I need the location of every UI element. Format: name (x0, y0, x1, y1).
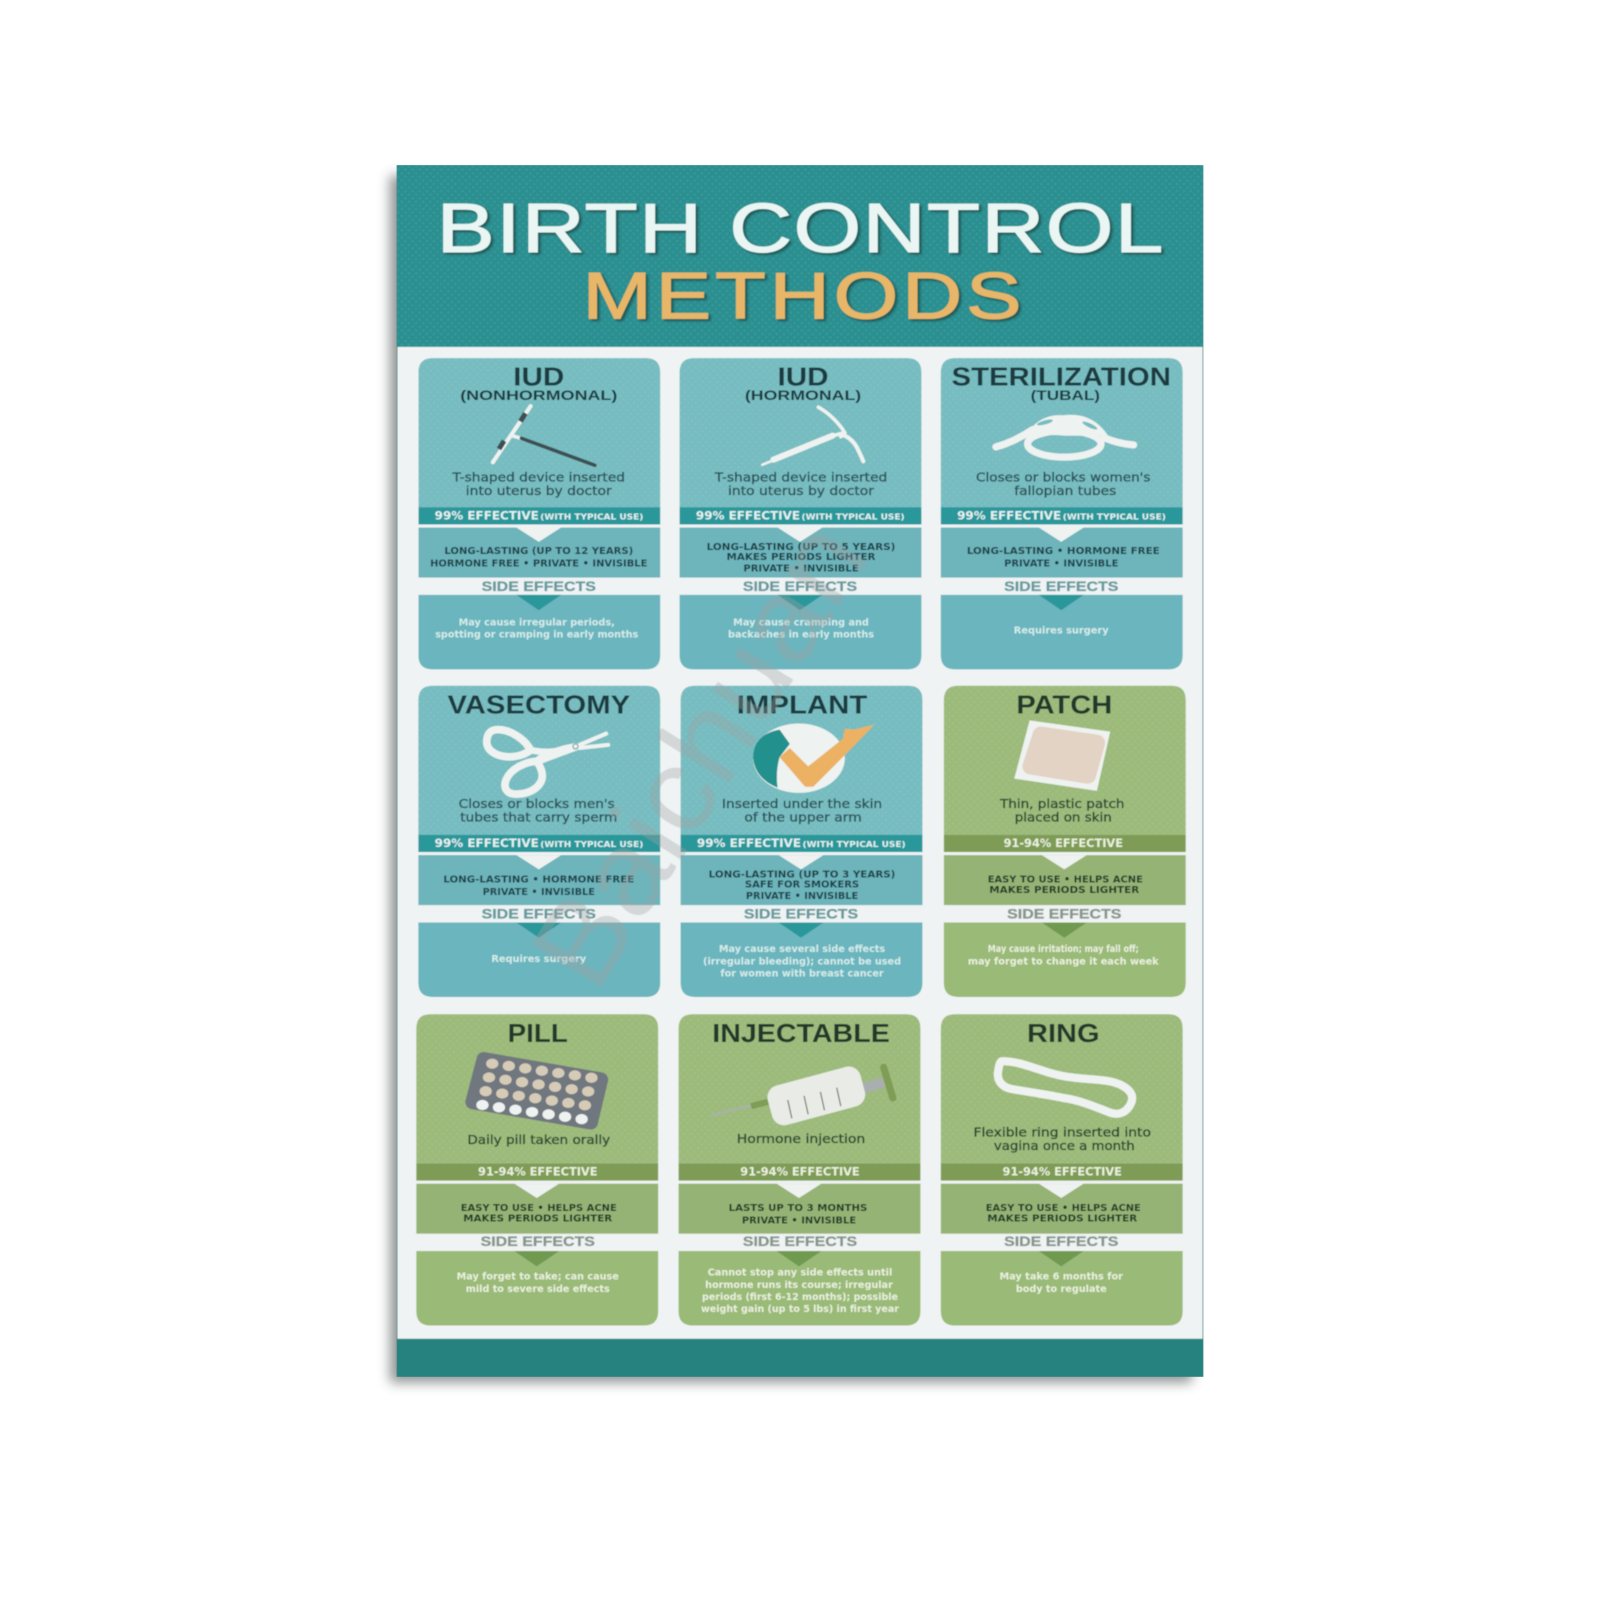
description (976, 471, 1151, 499)
side effects text: for women with breast cancer (720, 969, 884, 980)
benefits (707, 542, 895, 574)
description (451, 471, 625, 499)
heading: PILL (508, 1020, 568, 1048)
description (714, 471, 887, 499)
side effects label: SIDE EFFECTS (744, 906, 858, 922)
effectiveness band (435, 508, 644, 522)
heading: RING (1027, 1020, 1099, 1048)
panel: patch (944, 686, 1186, 997)
side effects text: body to regulate (1016, 1284, 1107, 1295)
side effects text: May take 6 months for (999, 1272, 1123, 1283)
effectiveness band: 99% EFFECTIVE (697, 836, 801, 850)
side effects text (968, 944, 1159, 967)
effectiveness band: 99% EFFECTIVE (435, 836, 539, 850)
heading: IMPLANT (737, 691, 868, 719)
benefits (709, 870, 895, 902)
panel: pill (416, 1014, 658, 1326)
subheading: (HORMONAL) (745, 388, 862, 404)
benefits: LONG-LASTING • HORMONE FREE (967, 546, 1160, 557)
description (722, 797, 882, 825)
panel: ring (941, 1014, 1183, 1326)
benefits: LONG-LASTING (UP TO 5 YEARS) (707, 542, 895, 553)
benefits: EASY TO USE • HELPS ACNE (988, 875, 1143, 886)
side effects label: SIDE EFFECTS (743, 579, 857, 595)
heading: PATCH (1016, 691, 1112, 719)
icon: pill pack (472, 1059, 601, 1124)
benefits: EASY TO USE • HELPS ACNE (461, 1203, 617, 1214)
watermark: Baichuan (506, 499, 894, 1010)
side effects text: May forget to take; can cause (457, 1272, 619, 1283)
side effects text: backaches in early months (728, 630, 874, 641)
benefits (988, 875, 1143, 896)
side effects label: SIDE EFFECTS (1007, 906, 1121, 922)
benefits: LASTS UP TO 3 MONTHS (729, 1203, 867, 1214)
side effects text: May cause irregular periods, (459, 618, 615, 629)
side effects text: may forget to change it each week (968, 956, 1159, 967)
side effects text: May cause irritation; may fall off; (988, 944, 1139, 955)
side effects text (457, 1272, 619, 1295)
benefits: MAKES PERIODS LIGHTER (989, 885, 1140, 896)
description: into uterus by doctor (728, 484, 875, 499)
side effects label: SIDE EFFECTS (482, 579, 596, 595)
side effects text: (irregular bleeding); cannot be used (703, 956, 901, 967)
effectiveness band: (WITH TYPICAL USE) (1063, 511, 1166, 521)
icon: ring (998, 1061, 1132, 1114)
icon: copper IUD (493, 406, 595, 465)
header band (397, 165, 1203, 347)
side effects text (435, 618, 638, 641)
effectiveness band: (WITH TYPICAL USE) (540, 511, 644, 521)
effectiveness band: 99% EFFECTIVE (957, 508, 1061, 522)
side effects label: SIDE EFFECTS (481, 1234, 595, 1250)
side effects text: weight gain (up to 5 lbs) in first year (701, 1304, 899, 1315)
icon: scissors (487, 730, 608, 794)
side effects label: SIDE EFFECTS (1004, 1234, 1118, 1250)
benefits: LONG-LASTING (UP TO 12 YEARS) (444, 546, 633, 557)
effectiveness band: 91-94% EFFECTIVE (1004, 836, 1123, 850)
benefits: PRIVATE • INVISIBLE (746, 891, 858, 902)
panel: IUD nonhormonal (418, 358, 660, 669)
poster shadow (390, 176, 1192, 1383)
effectiveness band: 91-94% EFFECTIVE (1003, 1165, 1122, 1179)
description (459, 797, 617, 825)
side effects text (701, 1268, 899, 1315)
panel: implant (681, 686, 922, 997)
side effects text (728, 618, 874, 641)
heading: VASECTOMY (447, 691, 630, 719)
effectiveness band (697, 836, 906, 850)
footer band (397, 1339, 1203, 1377)
title: birth control: BIRTH CONTROL (437, 189, 1163, 267)
description: Flexible ring inserted into (973, 1126, 1151, 1141)
effectiveness band: 99% EFFECTIVE (435, 508, 539, 522)
heading: STERILIZATION (952, 364, 1171, 392)
benefits (430, 546, 647, 569)
panel: IUD hormonal (680, 358, 921, 669)
panel: sterilization (941, 358, 1183, 669)
effectiveness band: (WITH TYPICAL USE) (803, 839, 906, 849)
benefits: EASY TO USE • HELPS ACNE (986, 1203, 1141, 1214)
heading: IUD (513, 364, 564, 392)
side effects label: SIDE EFFECTS (1004, 579, 1118, 595)
benefits (729, 1203, 867, 1226)
description: Closes or blocks men's (459, 797, 615, 812)
description: vagina once a month (994, 1139, 1135, 1154)
benefits: PRIVATE • INVISIBLE (1004, 558, 1118, 569)
side effects text: May cause cramping and (733, 618, 869, 629)
side effects text: periods (first 6-12 months); possible (702, 1292, 898, 1303)
side effects text: Requires surgery (491, 954, 587, 965)
effectiveness band: 91-94% EFFECTIVE (740, 1165, 860, 1179)
title: methods: METHODS (583, 258, 1021, 333)
description: into uterus by doctor (466, 484, 613, 499)
effectiveness band: 99% EFFECTIVE (696, 508, 800, 522)
description (973, 1126, 1151, 1154)
benefits (967, 546, 1160, 569)
heading: IUD (778, 364, 829, 392)
description: Hormone injection (737, 1132, 865, 1147)
poster (397, 165, 1203, 1377)
benefits (461, 1203, 617, 1224)
description: placed on skin (1015, 810, 1112, 825)
benefits: SAFE FOR SMOKERS (745, 880, 859, 891)
description: fallopian tubes (1014, 484, 1117, 499)
side effects label: SIDE EFFECTS (743, 1234, 857, 1250)
side effects text (999, 1272, 1123, 1295)
benefits (443, 875, 634, 898)
benefits: HORMONE FREE • PRIVATE • INVISIBLE (430, 558, 647, 569)
side effects text: Cannot stop any side effects until (708, 1268, 892, 1279)
side effects text: spotting or cramping in early months (435, 630, 638, 641)
icon: syringe (711, 1064, 893, 1128)
benefits: MAKES PERIODS LIGHTER (727, 552, 876, 563)
effectiveness band (957, 508, 1166, 522)
benefits: LONG-LASTING (UP TO 3 YEARS) (709, 870, 895, 881)
side effects text: May cause several side effects (719, 944, 885, 955)
description: T-shaped device inserted (714, 471, 887, 486)
side effects text: hormone runs its course; irregular (705, 1280, 893, 1291)
benefits: LONG-LASTING • HORMONE FREE (443, 875, 634, 886)
effectiveness band: (WITH TYPICAL USE) (802, 511, 905, 521)
icon: knot (996, 415, 1134, 457)
subheading: (TUBAL) (1031, 388, 1100, 404)
panel: vasectomy (418, 686, 660, 997)
subheading: (NONHORMONAL) (460, 388, 618, 404)
description: Thin, plastic patch (999, 797, 1124, 812)
effectiveness band: 91-94% EFFECTIVE (478, 1165, 597, 1179)
description: Closes or blocks women's (976, 471, 1151, 486)
side effects text: Requires surgery (1014, 626, 1109, 637)
benefits: MAKES PERIODS LIGHTER (987, 1213, 1138, 1224)
side effects label: SIDE EFFECTS (482, 906, 596, 922)
description: tubes that carry sperm (460, 810, 617, 825)
effectiveness band: (WITH TYPICAL USE) (540, 839, 644, 849)
panel: injectable (679, 1014, 920, 1326)
benefits (986, 1203, 1141, 1224)
benefits: PRIVATE • INVISIBLE (743, 563, 859, 574)
benefits: PRIVATE • INVISIBLE (483, 887, 595, 898)
benefits: MAKES PERIODS LIGHTER (463, 1213, 613, 1224)
effectiveness band (435, 836, 644, 850)
description: Inserted under the skin (722, 797, 882, 812)
side effects text (703, 944, 901, 980)
description: Daily pill taken orally (467, 1133, 611, 1148)
icon: patch (1014, 720, 1110, 791)
icon: arm (753, 723, 874, 793)
heading: INJECTABLE (712, 1020, 890, 1048)
effectiveness band (696, 508, 905, 522)
description: T-shaped device inserted (451, 471, 625, 486)
description (999, 797, 1124, 825)
benefits: PRIVATE • INVISIBLE (742, 1215, 856, 1226)
side effects text: mild to severe side effects (466, 1284, 610, 1295)
description: of the upper arm (744, 810, 862, 825)
icon: hormonal IUD (762, 407, 863, 465)
